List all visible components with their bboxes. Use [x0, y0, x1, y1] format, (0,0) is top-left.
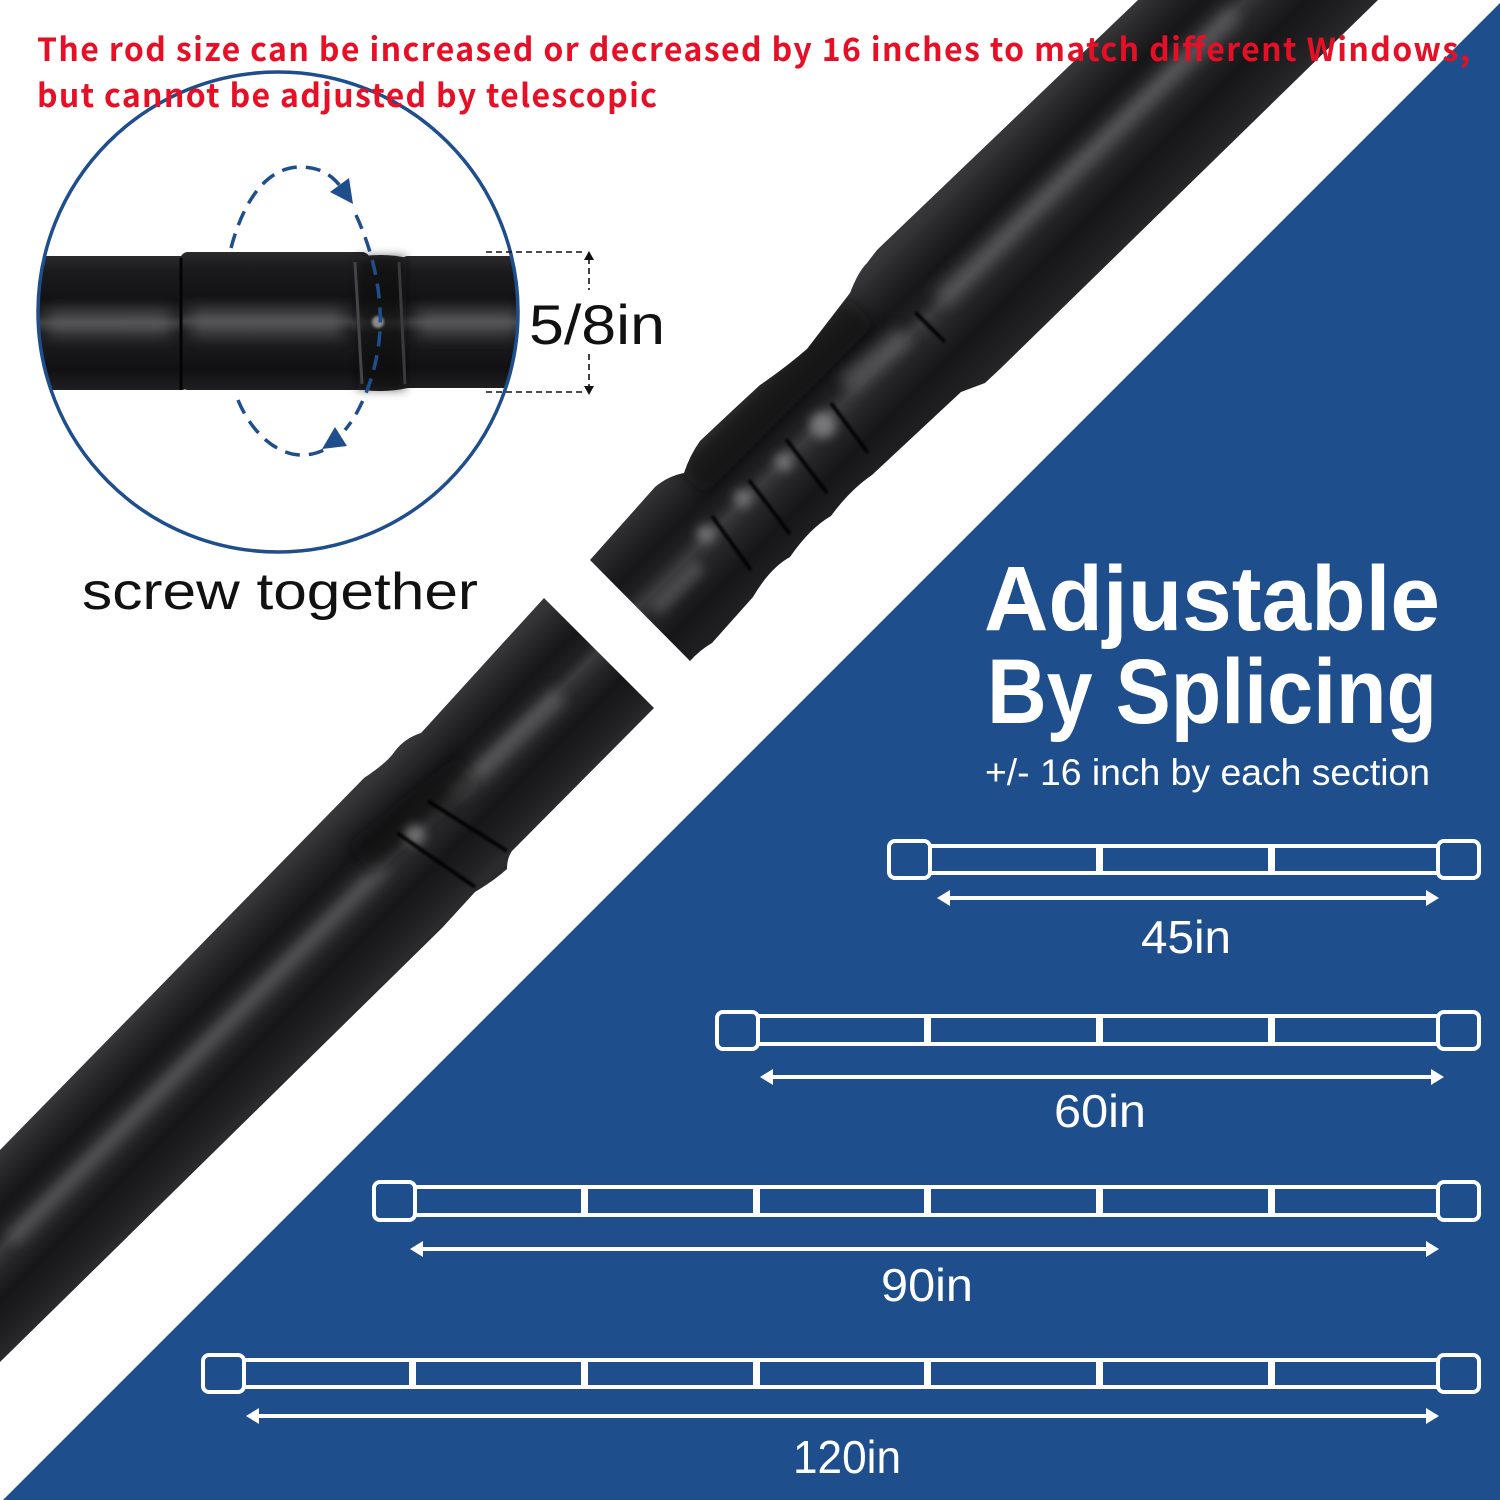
dashed rotation arrows: [231, 167, 380, 455]
rod diagram: 45in: [889, 841, 1479, 963]
lower curtain rod section: [0, 590, 670, 1370]
caption: screw together: screw together: [82, 563, 478, 621]
heading: Adjustable By Splicing: By Splicing: [987, 641, 1437, 743]
subheading: +/- 16 inch by each section: [985, 752, 1430, 793]
red notice text: but cannot be adjusted by telescopic: [37, 71, 657, 117]
dimension marker 5/8in: [486, 251, 665, 395]
arrowhead bottom: [322, 427, 347, 449]
rod diagram: 45in: 45in: [1141, 911, 1231, 963]
red notice text: The rod size can be increased or decreased by 16 inches to match different Windows,: [37, 25, 1470, 71]
rod diagram: 90in: 90in: [881, 1259, 973, 1311]
magnified detail circle: screw joint: [38, 72, 520, 552]
rod diagram: 60in: 60in: [1054, 1085, 1146, 1137]
heading: Adjustable By Splicing: [984, 548, 1440, 743]
circle outline: [38, 72, 518, 552]
rod diagram: 120in: [203, 1355, 1479, 1483]
rod diagram: 60in: [717, 1012, 1479, 1137]
rod diagram: 90in: [374, 1182, 1479, 1311]
heading: Adjustable By Splicing: Adjustable: [984, 548, 1440, 650]
rod diagram: 120in: 120in: [793, 1431, 901, 1483]
dimension marker 5/8in: 5/8in: [529, 293, 665, 356]
inset rod: [38, 252, 520, 391]
arrowhead top: [330, 178, 353, 204]
red notice text: [37, 25, 1470, 117]
upper curtain rod section: [560, 0, 1400, 680]
